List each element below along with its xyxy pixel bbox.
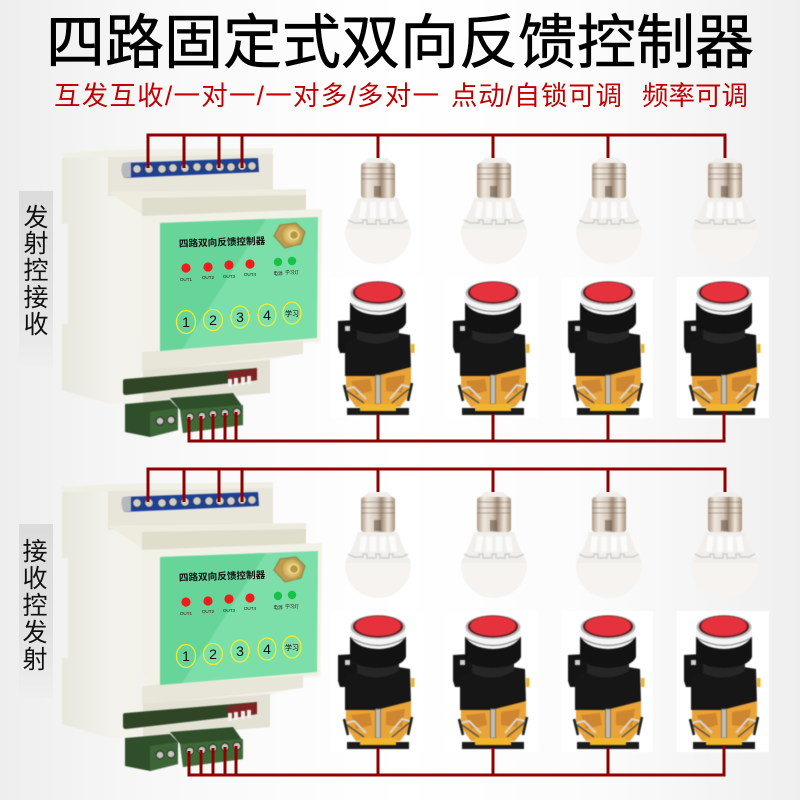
panel title: 四路双向反馈控制器 bbox=[179, 569, 266, 584]
numbered buttons bbox=[176, 302, 301, 334]
status LEDs: 学习灯 bbox=[285, 603, 299, 610]
status LEDs: OUT3 bbox=[223, 274, 236, 279]
numbered buttons: 3 bbox=[236, 643, 244, 659]
bulbs: bottom row bbox=[345, 492, 758, 598]
numbered buttons: 4 bbox=[263, 641, 271, 657]
status LEDs: OUT1 bbox=[180, 611, 193, 616]
numbered buttons: 1 bbox=[182, 648, 190, 664]
wiring: bottom module bbox=[148, 469, 725, 775]
status LEDs: 电源 bbox=[273, 270, 283, 277]
controller module: top bbox=[62, 148, 322, 437]
push buttons: top row bbox=[331, 277, 769, 418]
numbered buttons: 3 bbox=[236, 309, 244, 325]
panel title: 四路双向反馈控制器 bbox=[179, 235, 266, 250]
side label: receive controls transmit: 发 bbox=[22, 619, 48, 647]
status LEDs: OUT4 bbox=[244, 606, 257, 611]
side label: transmit controls receive bbox=[19, 191, 53, 368]
status LEDs: OUT1 bbox=[180, 277, 193, 282]
subtitle: features: 互发互收/一对一/一对多/多对一 bbox=[54, 81, 439, 111]
side label: receive controls transmit: 射 bbox=[22, 646, 48, 674]
subtitle: features: 点动/自锁可调 bbox=[451, 81, 622, 111]
side label: transmit controls receive: 接 bbox=[23, 284, 49, 312]
side label: receive controls transmit: 收 bbox=[22, 565, 48, 593]
side label: receive controls transmit: 控 bbox=[22, 592, 48, 620]
status LEDs: OUT4 bbox=[244, 272, 257, 277]
status LEDs: 电源 bbox=[273, 604, 283, 611]
status LEDs: OUT2 bbox=[202, 275, 215, 280]
side label: transmit controls receive: 控 bbox=[23, 257, 49, 285]
numbered buttons: 学习 bbox=[285, 309, 299, 318]
numbered buttons: 2 bbox=[209, 646, 217, 662]
numbered buttons: 4 bbox=[263, 307, 271, 323]
side label: transmit controls receive: 收 bbox=[23, 311, 49, 339]
wiring: top module bbox=[148, 135, 725, 441]
status LEDs: OUT2 bbox=[202, 609, 215, 614]
status LEDs: 学习灯 bbox=[285, 269, 299, 276]
controller module: bottom bbox=[62, 482, 322, 771]
status LEDs bbox=[180, 257, 299, 282]
subtitle: features: 频率可调 bbox=[642, 81, 748, 111]
numbered buttons: 学习 bbox=[285, 643, 299, 652]
push buttons: bottom row bbox=[331, 611, 769, 752]
side label: receive controls transmit: 接 bbox=[22, 538, 48, 566]
numbered buttons: 1 bbox=[182, 314, 190, 330]
status LEDs bbox=[180, 591, 299, 616]
title: 四路固定式双向反馈控制器 bbox=[46, 10, 754, 76]
side label: transmit controls receive: 发 bbox=[23, 204, 49, 232]
subtitle: features bbox=[54, 81, 748, 111]
side label: transmit controls receive: 射 bbox=[23, 230, 49, 258]
numbered buttons bbox=[176, 636, 301, 668]
side label: receive controls transmit bbox=[19, 524, 53, 698]
numbered buttons: 2 bbox=[209, 312, 217, 328]
bulbs: top row bbox=[345, 158, 758, 264]
status LEDs: OUT3 bbox=[223, 608, 236, 613]
